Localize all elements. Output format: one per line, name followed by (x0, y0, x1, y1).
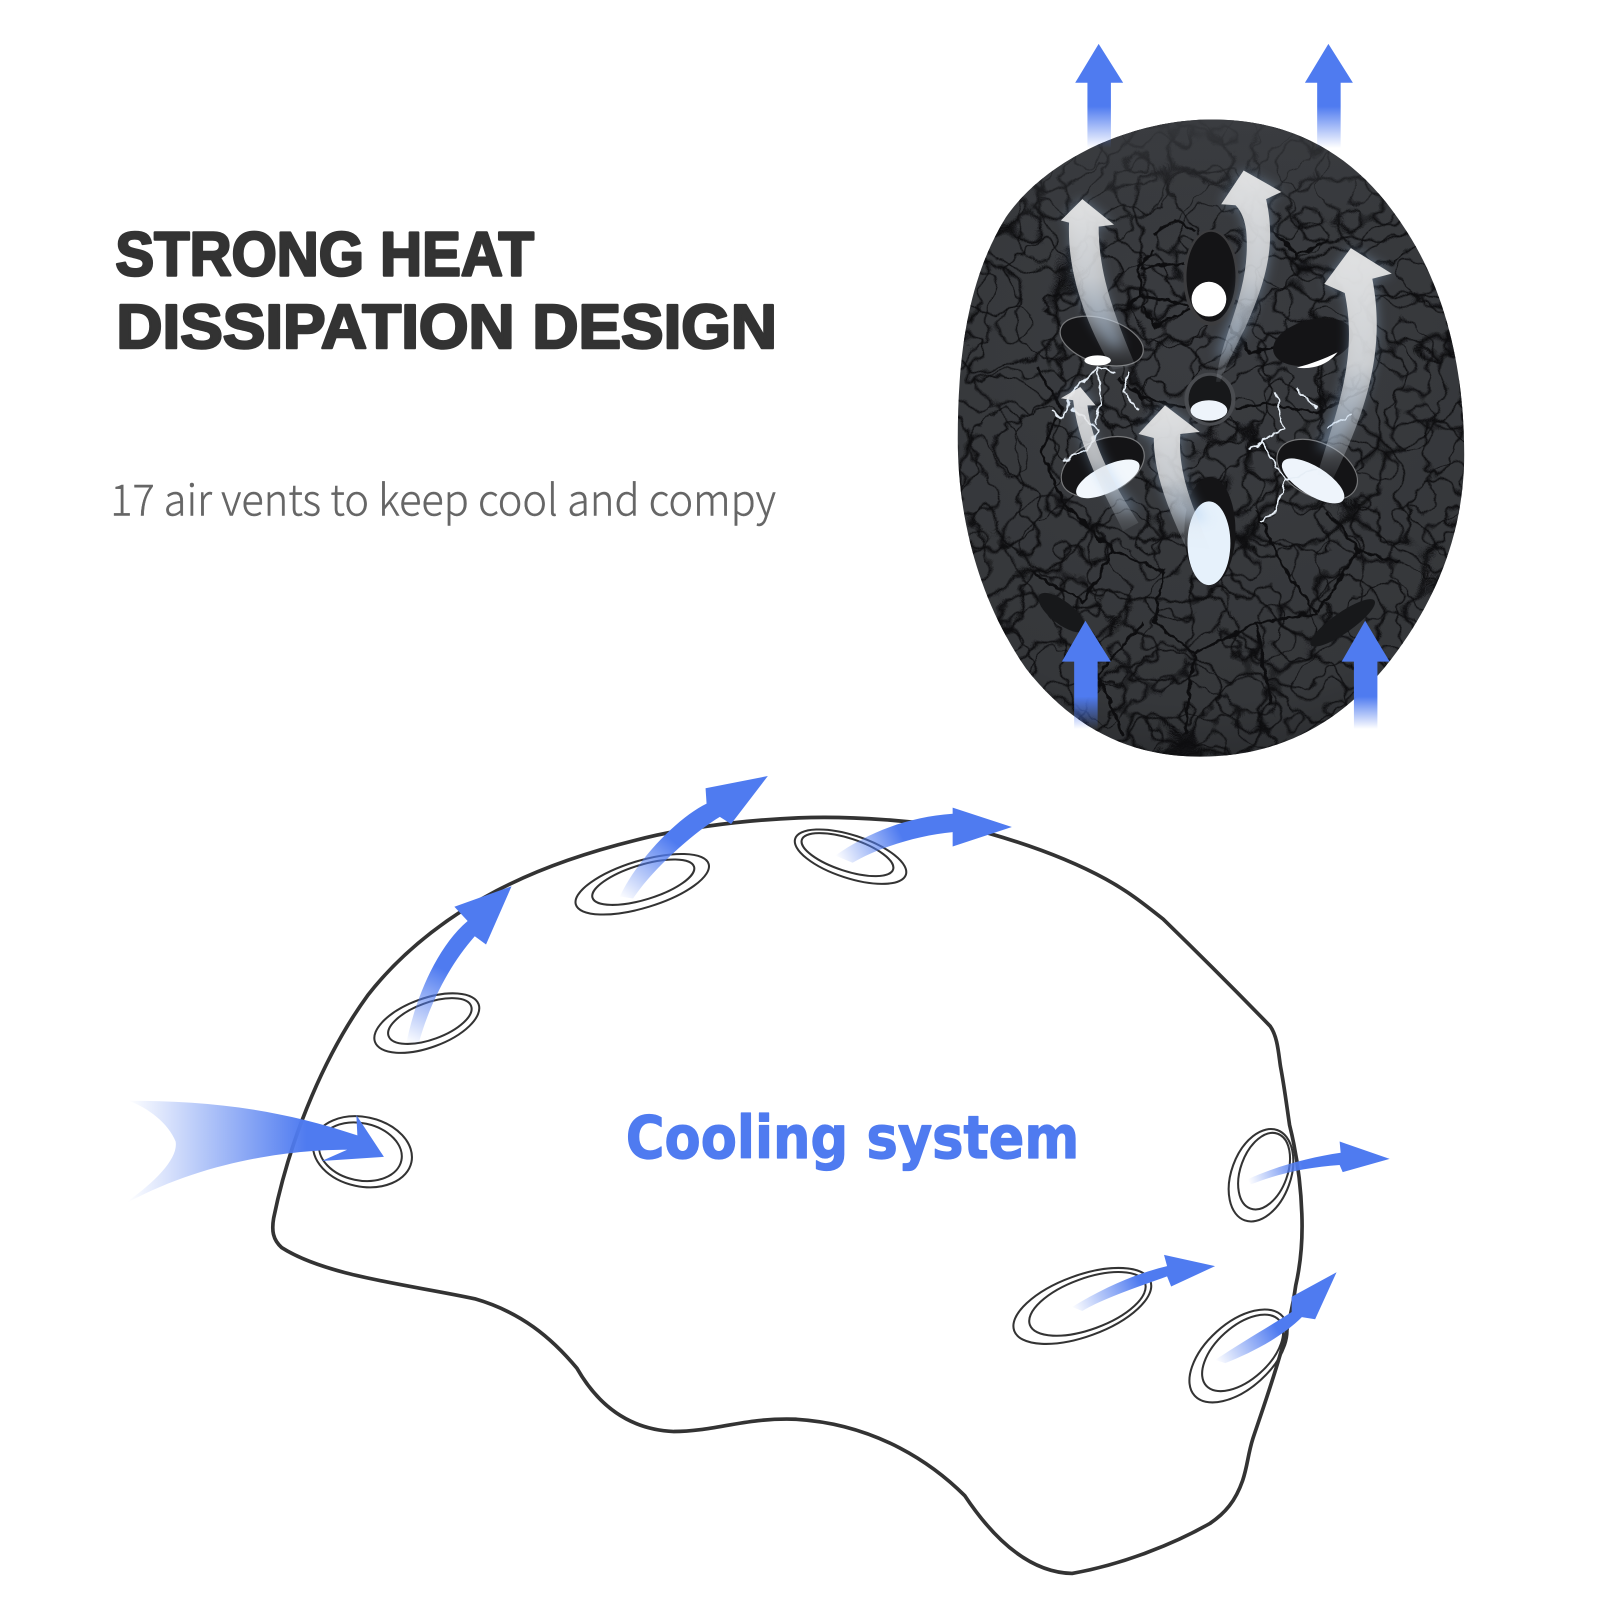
arrow: white airflow left (1061, 199, 1135, 370)
vent ring: rear (1217, 1120, 1305, 1230)
arrow: white airflow top centre (1216, 171, 1281, 382)
vent: lower right (1267, 427, 1367, 512)
vent: centre (1184, 373, 1235, 426)
vent: top (1183, 230, 1239, 326)
arrow: exhaust top left (620, 776, 768, 899)
vent ring: upper left (367, 981, 487, 1065)
crack texture (950, 112, 1470, 766)
vent: upper right (1268, 310, 1358, 374)
helmet photo (950, 112, 1470, 766)
vent: side left slit (1032, 586, 1091, 639)
vent: bottom (1184, 477, 1235, 585)
vent: side right slit (1305, 592, 1380, 653)
arrow: intake (119, 1101, 384, 1207)
vent ring: lower rear (1173, 1292, 1304, 1420)
arrow: exhaust rear (1248, 1142, 1390, 1184)
vent ring: lower middle (1004, 1252, 1161, 1360)
arrow: exhaust lower rear (1215, 1272, 1337, 1363)
arrow: exhaust upper left (406, 886, 512, 1044)
helmet outline (273, 817, 1302, 1573)
arrow: blue up top right (1305, 44, 1353, 148)
vent ring: top left (569, 841, 716, 927)
white lightning cracks (1052, 368, 1353, 521)
vent ring: top (789, 818, 913, 895)
arrow: blue up bottom right (1342, 621, 1390, 729)
arrow: white airflow lower centre (1138, 405, 1210, 549)
vent ring: intake (306, 1107, 419, 1196)
vent: upper left (1054, 307, 1149, 375)
arrow: white airflow lower left (1061, 387, 1138, 531)
title: DISSIPATION DESIGN (116, 293, 777, 362)
vent: lower left (1052, 425, 1154, 509)
cooling system label: Cooling system (626, 1103, 1079, 1172)
arrow: blue up top left (1075, 44, 1123, 148)
subtitle text: 17 air vents to keep cool and compy (110, 467, 776, 529)
helmet shell (958, 119, 1464, 757)
arrow: exhaust lower middle (1072, 1255, 1215, 1311)
title: STRONG HEAT (115, 221, 534, 290)
arrow: exhaust top (835, 808, 1012, 863)
airflow glow (1061, 171, 1392, 521)
arrow: blue up bottom left (1062, 621, 1111, 729)
title (115, 221, 777, 362)
arrow: white airflow right (1317, 248, 1392, 480)
helmet outline diagram (119, 776, 1390, 1573)
